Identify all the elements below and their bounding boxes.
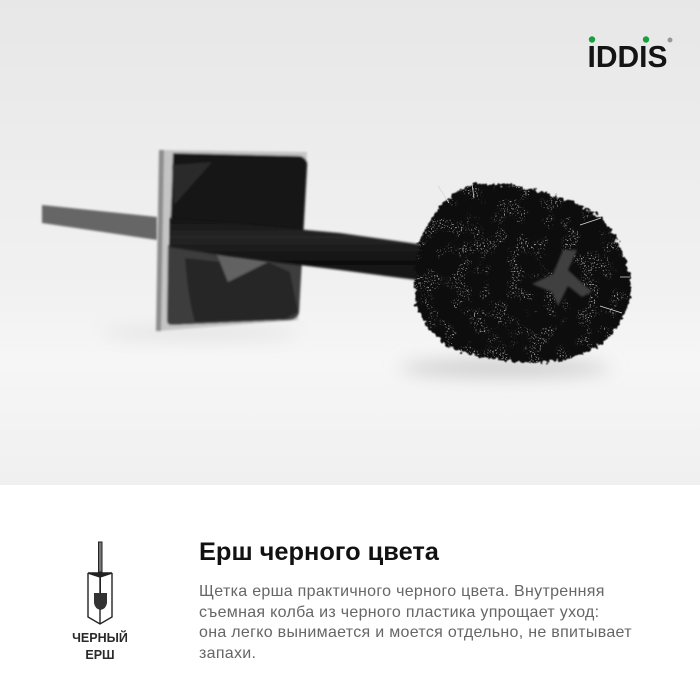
description text (199, 583, 632, 662)
brush head (410, 180, 635, 366)
wall plate (156, 150, 307, 331)
shadow under brush (400, 360, 610, 376)
stick behind plate (42, 205, 157, 240)
description text: она легко вынимается и моется отдельно, не впитывает (199, 624, 632, 641)
heading: Ерш черного цвета (199, 538, 439, 566)
description text: съемная колба из черного пластика упрощает уход: (199, 604, 599, 620)
description text: Щетка ерша практичного черного цвета. Внутренняя (199, 583, 605, 600)
icon label: ЧЕРНЫЙ (72, 631, 128, 645)
photo: black toilet brush (0, 0, 700, 485)
icon label: ЕРШ (85, 648, 115, 662)
shadow under plate (100, 328, 300, 338)
description text: запахи. (199, 644, 256, 662)
brush handle (170, 218, 432, 282)
icon label (72, 630, 128, 662)
logo: IDDIS: IDDIS (588, 40, 668, 74)
icon: black brush in holder (87, 542, 113, 625)
